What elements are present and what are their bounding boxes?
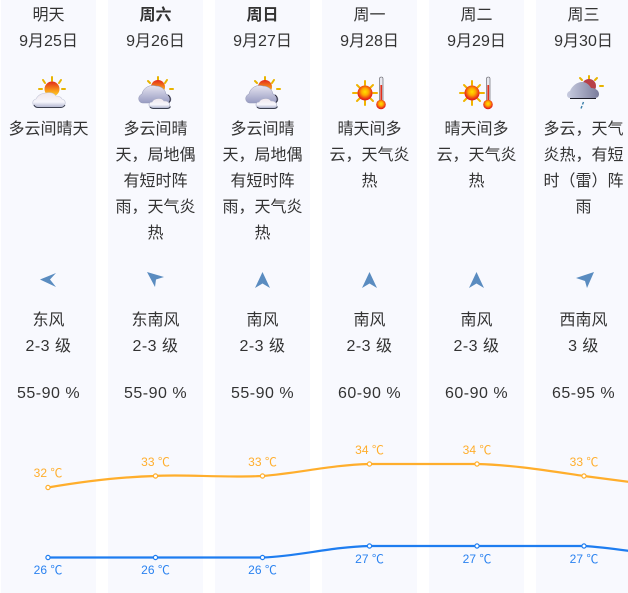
high temperature line: 34 ℃ xyxy=(463,443,491,457)
icon: partly cloudy, clear xyxy=(32,76,66,108)
icon: cloud with sun and shower xyxy=(567,75,604,109)
weather description: 热 xyxy=(361,173,378,190)
weather description: 晴天间多 xyxy=(337,121,402,138)
day label: 周三 xyxy=(567,7,600,24)
weather description xyxy=(544,120,624,216)
date: 9月29日 xyxy=(447,33,506,50)
weather description: 有短时阵 xyxy=(230,173,294,190)
weather description: 热 xyxy=(147,225,164,242)
day label: 周二 xyxy=(460,7,492,24)
column: 明天 xyxy=(1,0,96,593)
weather description: 雨，天气炎 xyxy=(222,199,303,216)
weather description: 云，天气炎 xyxy=(330,147,410,164)
weather description: 多云间晴 xyxy=(123,121,188,138)
column: 周二 xyxy=(429,0,524,593)
high temperature line: 33 ℃ xyxy=(248,455,277,469)
icon: wind direction southeast xyxy=(147,272,164,287)
humidity: 55-90 % xyxy=(231,385,294,402)
weather description: 多云间晴 xyxy=(230,121,294,138)
weather description: 炎热，有短 xyxy=(544,147,624,164)
weather description: 时（雷）阵 xyxy=(544,173,624,190)
weather description xyxy=(222,120,303,242)
column: 周三 xyxy=(536,0,628,593)
weather description xyxy=(436,120,517,190)
day label: 明天 xyxy=(32,7,64,24)
icon: wind direction east xyxy=(40,273,56,287)
icon: wind direction south xyxy=(362,272,377,288)
icon: cloudy with sun xyxy=(246,76,281,109)
weather description: 热 xyxy=(468,173,484,190)
high temperature line: 33 ℃ xyxy=(570,455,598,469)
high temperature line: 32 ℃ xyxy=(34,466,62,480)
low temperature line: 26 ℃ xyxy=(34,563,62,577)
weather description: 晴天间多 xyxy=(444,121,508,138)
column: 周六 xyxy=(108,0,203,593)
wind force: 3 级 xyxy=(568,338,599,355)
weather description: 多云，天气 xyxy=(544,121,624,138)
high temperature line xyxy=(34,443,628,490)
day label: 周日 xyxy=(246,7,278,24)
wind force: 2-3 级 xyxy=(239,338,286,355)
column: 周一 xyxy=(322,0,417,593)
wind force: 2-3 级 xyxy=(453,338,500,355)
date: 9月27日 xyxy=(233,33,292,50)
humidity: 60-90 % xyxy=(445,385,508,402)
humidity: 60-90 % xyxy=(338,385,401,402)
date: 9月26日 xyxy=(126,33,185,50)
humidity: 65-95 % xyxy=(552,385,615,402)
low temperature line: 27 ℃ xyxy=(570,552,598,566)
weather description: 天，局地偶 xyxy=(116,147,196,164)
wind direction: 东风 xyxy=(32,312,64,329)
low temperature line: 26 ℃ xyxy=(248,563,277,577)
high temperature line: 34 ℃ xyxy=(355,443,384,457)
low temperature line: 27 ℃ xyxy=(463,552,491,566)
icon: wind direction south xyxy=(469,272,484,288)
high temperature line: 33 ℃ xyxy=(141,455,170,469)
humidity: 55-90 % xyxy=(124,385,187,402)
weather description: 雨，天气炎 xyxy=(116,199,196,216)
wind direction: 西南风 xyxy=(559,312,608,329)
date: 9月28日 xyxy=(340,33,399,50)
wind direction: 南风 xyxy=(246,312,278,329)
weather description: 多云间晴天 xyxy=(8,121,89,138)
low temperature line: 26 ℃ xyxy=(141,563,170,577)
weather description: 热 xyxy=(254,225,270,242)
weather description: 云，天气炎 xyxy=(436,147,517,164)
date: 9月30日 xyxy=(554,33,613,50)
icon: wind direction southwest xyxy=(576,272,594,288)
wind direction: 南风 xyxy=(460,312,492,329)
low temperature line: 27 ℃ xyxy=(355,552,384,566)
weather description: 天，局地偶 xyxy=(222,147,303,164)
icon: wind direction south xyxy=(255,272,270,288)
wind force: 2-3 级 xyxy=(346,338,393,355)
icon: hot sun with thermometer xyxy=(352,76,386,110)
date: 9月25日 xyxy=(19,33,78,50)
day label: 周六 xyxy=(139,7,172,24)
icon: cloudy with sun xyxy=(138,76,174,109)
wind direction: 东南风 xyxy=(131,312,180,329)
weather description: 有短时阵 xyxy=(123,173,188,190)
day label: 周一 xyxy=(353,7,386,24)
column: 周日 xyxy=(215,0,310,593)
wind force: 2-3 级 xyxy=(25,338,72,355)
weather description xyxy=(116,120,196,242)
low temperature line xyxy=(34,544,628,577)
weather description: 雨 xyxy=(575,199,592,216)
icon: hot sun with thermometer xyxy=(459,76,493,110)
humidity: 55-90 % xyxy=(17,385,80,402)
wind direction: 南风 xyxy=(353,312,386,329)
wind force: 2-3 级 xyxy=(132,338,179,355)
weather description xyxy=(330,120,410,190)
